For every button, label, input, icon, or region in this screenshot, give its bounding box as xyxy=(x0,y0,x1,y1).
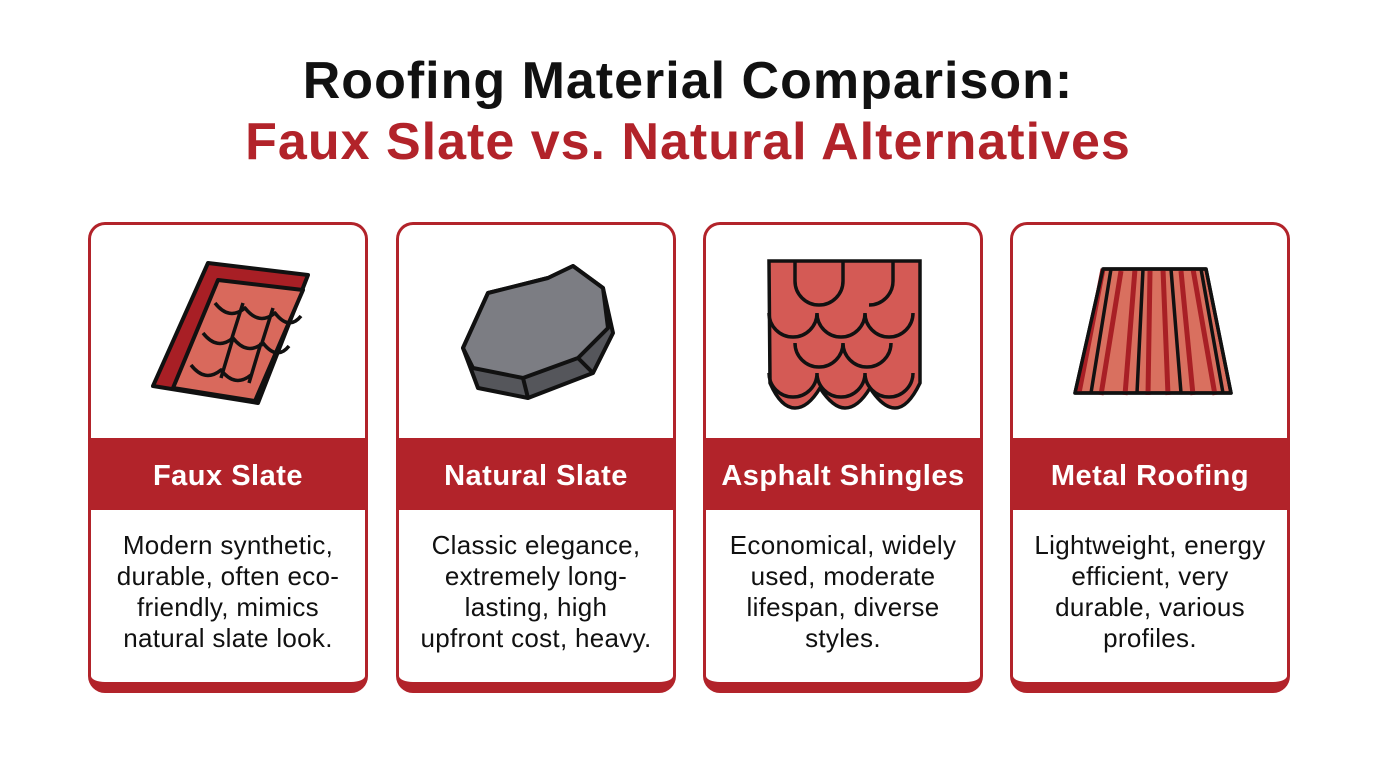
label band xyxy=(1013,438,1287,510)
description: Economical, widely xyxy=(730,530,956,560)
panel: asphalt shingles xyxy=(703,222,983,693)
label band: Faux Slate xyxy=(153,460,303,492)
description xyxy=(730,530,956,653)
icon: shingles xyxy=(767,259,922,410)
description: efficient, very xyxy=(1071,561,1229,591)
label band xyxy=(399,438,673,510)
description: used, moderate xyxy=(751,561,935,591)
description xyxy=(1034,530,1266,653)
icon: faux slate tile xyxy=(151,261,310,405)
panel: metal roofing xyxy=(1010,222,1290,693)
description: friendly, mimics xyxy=(137,592,319,622)
description: extremely long- xyxy=(445,561,627,591)
description: natural slate look. xyxy=(123,623,333,653)
label band xyxy=(91,438,365,510)
description: Modern synthetic, xyxy=(123,530,333,560)
icon: corrugated metal xyxy=(1073,267,1233,396)
icon: slate stone xyxy=(461,264,615,400)
label band: Asphalt Shingles xyxy=(721,460,965,492)
panel: faux slate xyxy=(88,222,368,693)
description: durable, often eco- xyxy=(117,561,339,591)
label band xyxy=(706,438,980,510)
title: Roofing Material Comparison: xyxy=(303,52,1073,110)
label band: Metal Roofing xyxy=(1051,460,1249,492)
description xyxy=(117,530,339,653)
description: Lightweight, energy xyxy=(1034,530,1266,560)
subtitle: Faux Slate vs. Natural Alternatives xyxy=(245,113,1131,171)
description: durable, various xyxy=(1055,592,1245,622)
description: Classic elegance, xyxy=(432,530,640,560)
label band: Natural Slate xyxy=(444,460,628,492)
description: upfront cost, heavy. xyxy=(420,623,651,653)
description: styles. xyxy=(805,623,881,653)
description: lasting, high xyxy=(465,592,607,622)
description xyxy=(420,530,651,653)
panel: natural slate xyxy=(396,222,676,693)
description: lifespan, diverse xyxy=(746,592,939,622)
description: profiles. xyxy=(1103,623,1197,653)
